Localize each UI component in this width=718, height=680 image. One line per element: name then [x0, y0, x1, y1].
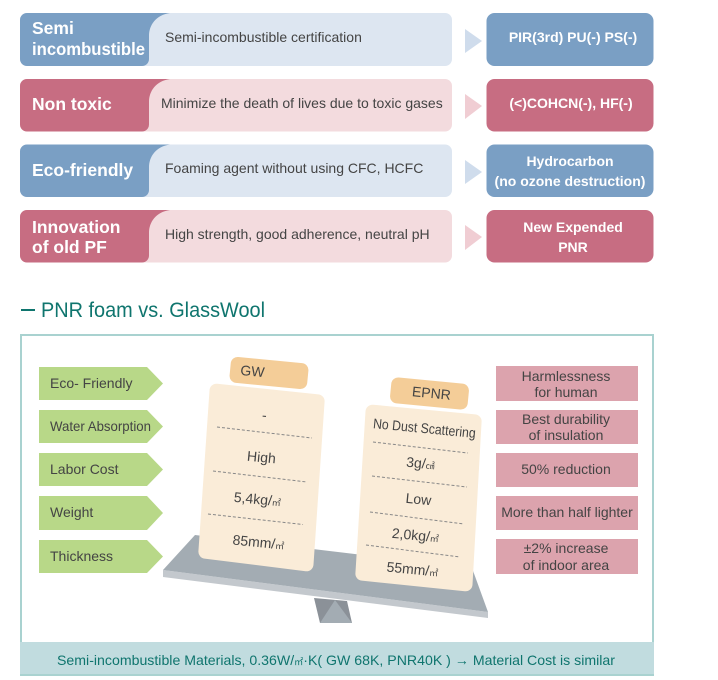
green criteria arrows: Weight [50, 504, 93, 520]
bottom summary band [20, 642, 654, 676]
row: eco-friendly: Eco-friendly [32, 160, 133, 180]
green criteria arrows: Thickness [50, 548, 113, 564]
scale beam [163, 535, 488, 618]
EPNR card: EPNR [411, 383, 452, 403]
EPNR card: 55mm/㎡ [386, 559, 439, 579]
row: non toxic [20, 79, 654, 132]
green criteria arrows [39, 367, 163, 573]
row: eco-friendly: Hydrocarbon [526, 153, 614, 169]
row: non toxic: Minimize the death of lives due to toxic gases [161, 95, 443, 111]
green criteria arrows: Eco- Friendly [50, 375, 132, 391]
EPNR card: No Dust Scattering [372, 415, 477, 441]
GW card: GW [240, 362, 266, 380]
row: semi incombustible [20, 13, 654, 66]
row: innovation of old PF: PNR [558, 239, 588, 255]
GW card [205, 356, 318, 564]
row: semi incombustible: PIR(3rd) PU(-) PS(-) [509, 29, 637, 45]
row: innovation of old PF: of old PF [32, 237, 107, 257]
pink benefit boxes: 50% reduction [521, 461, 611, 477]
row: innovation of old PF [20, 210, 654, 262]
row: eco-friendly: (no ozone destruction) [495, 173, 645, 189]
row: eco-friendly: Foaming agent without using CFC, HCFC [165, 160, 423, 176]
bottom summary band: Semi-incombustible Materials, 0.36W/㎡·K( GW 68K, PNR40K ) → Material Cost is similar [57, 652, 615, 668]
EPNR card: 2,0kg/㎡ [391, 525, 440, 545]
pink benefit boxes: Harmlessness [522, 368, 610, 384]
GW card: - [261, 407, 268, 423]
row: semi incombustible: incombustible [32, 39, 145, 59]
row: innovation of old PF: New Expended [523, 219, 623, 235]
pink benefit boxes: ±2% increase [524, 540, 609, 556]
row: non toxic: (<)COHCN(-), HF(-) [509, 95, 633, 111]
green criteria arrows: Labor Cost [50, 461, 119, 477]
row: innovation of old PF: High strength, good adherence, neutral pH [165, 226, 430, 242]
GW card: 85mm/㎡ [232, 532, 285, 552]
GW card: High [246, 448, 277, 466]
panel: comparison frame [21, 335, 653, 675]
row: innovation of old PF: Innovation [32, 217, 120, 237]
EPNR card [362, 377, 477, 584]
row: semi incombustible: Semi-incombustible certification [165, 29, 362, 45]
pink benefit boxes [496, 366, 638, 574]
EPNR card: 3g/㎠ [406, 454, 435, 472]
row: semi incombustible: Semi [32, 18, 74, 38]
row: eco-friendly [20, 144, 654, 197]
scale stand [314, 598, 352, 623]
heading: PNR foam vs. GlassWool: PNR foam vs. GlassWool [41, 298, 265, 322]
pink benefit boxes: for human [534, 384, 598, 400]
green criteria arrows: Water Absorption [50, 418, 151, 434]
pink benefit boxes: More than half lighter [501, 504, 633, 520]
EPNR card: Low [405, 490, 433, 508]
pink benefit boxes: of indoor area [523, 557, 609, 573]
pink benefit boxes: Best durability [522, 411, 610, 427]
row: non toxic: Non toxic [32, 94, 112, 114]
GW card: 5,4kg/㎡ [233, 489, 282, 509]
pink benefit boxes: of insulation [529, 427, 603, 443]
